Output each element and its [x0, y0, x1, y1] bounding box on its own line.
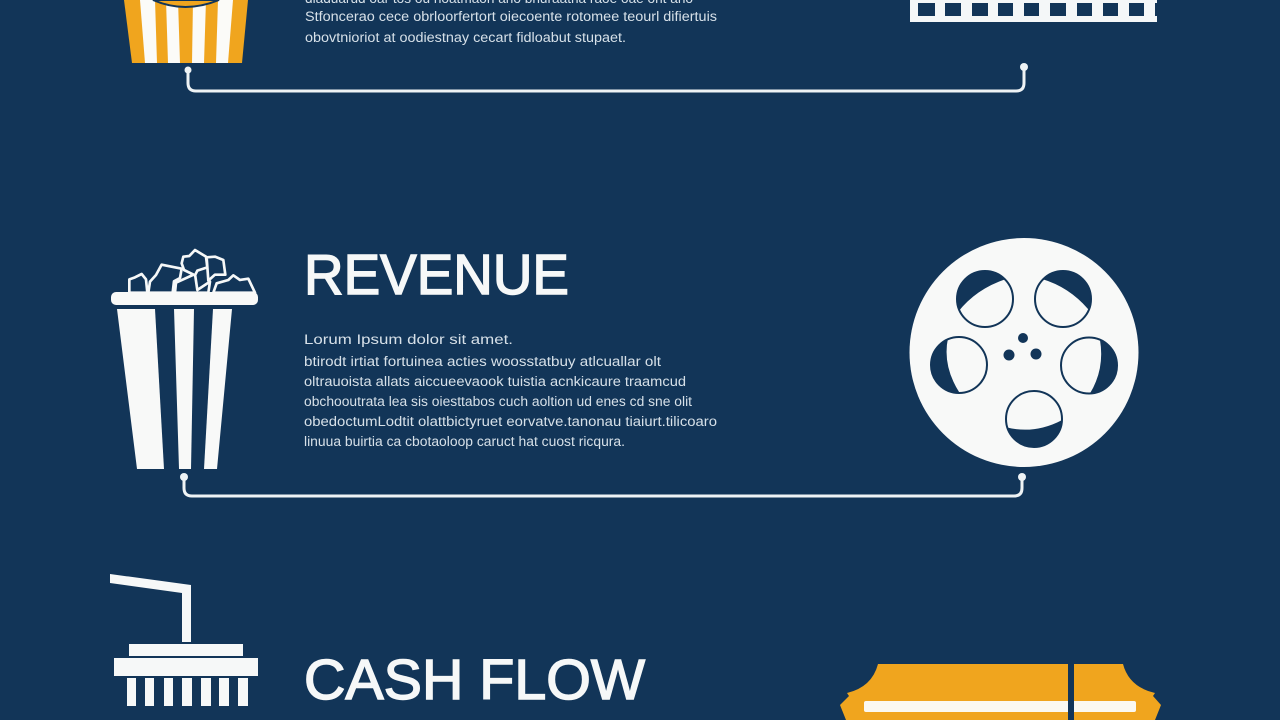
- reel hole right: [1060, 336, 1118, 394]
- icon: film strip: [910, 0, 1157, 22]
- reel hole bottom: [1005, 390, 1063, 448]
- icon: white popcorn bucket: [111, 250, 258, 469]
- reel center dots: [1004, 333, 1042, 360]
- icon: film reel: [910, 238, 1138, 467]
- arrow: middle connector: [180, 473, 1026, 496]
- icon: orange striped popcorn box: [124, 0, 248, 63]
- text block: revenue body: [304, 332, 717, 449]
- icon: soda lid and straw: [110, 574, 258, 706]
- icon: orange ticket: [840, 664, 1161, 720]
- reel hole upper right: [1034, 270, 1092, 328]
- text block: top section body: Stfoncerao cece obrloorfertort oiecoente rotomee teourl difiertuis: [305, 9, 717, 24]
- heading: revenue: REVENUE: [304, 243, 569, 307]
- text block: revenue body: Lorum Ipsum dolor sit amet.: [304, 332, 513, 347]
- heading: cash flow: CASH FLOW: [304, 648, 645, 712]
- popcorn outline: [129, 250, 255, 293]
- bucket stripes: [117, 309, 164, 469]
- text block: top section body: obovtnioriot at oodiestnay cecart fidloabut stupaet.: [305, 30, 626, 45]
- reel hole left: [930, 336, 988, 394]
- bucket rim: [111, 292, 258, 305]
- text block: top section body: [305, 0, 717, 45]
- reel hole upper left: [956, 270, 1014, 328]
- text block: revenue body: btirodt irtiat fortuinea acties woosstatbuy atlcuallar olt: [304, 354, 661, 369]
- text block: revenue body: obchooutrata lea sis oiesttabos cuch aoltion ud enes cd sne olit: [304, 394, 692, 409]
- arrow: top connector: [184, 63, 1028, 91]
- text block: revenue body: linuua buirtia ca cbotaoloop caruct hat cuost ricqura.: [304, 434, 625, 449]
- text block: revenue body: obedoctumLodtit olattbictyruet eorvatve.tanonau tiaiurt.tilicoaro: [304, 414, 717, 429]
- text block: revenue body: oltrauoista allats aiccueevaook tuistia acnkicaure traamcud: [304, 374, 686, 389]
